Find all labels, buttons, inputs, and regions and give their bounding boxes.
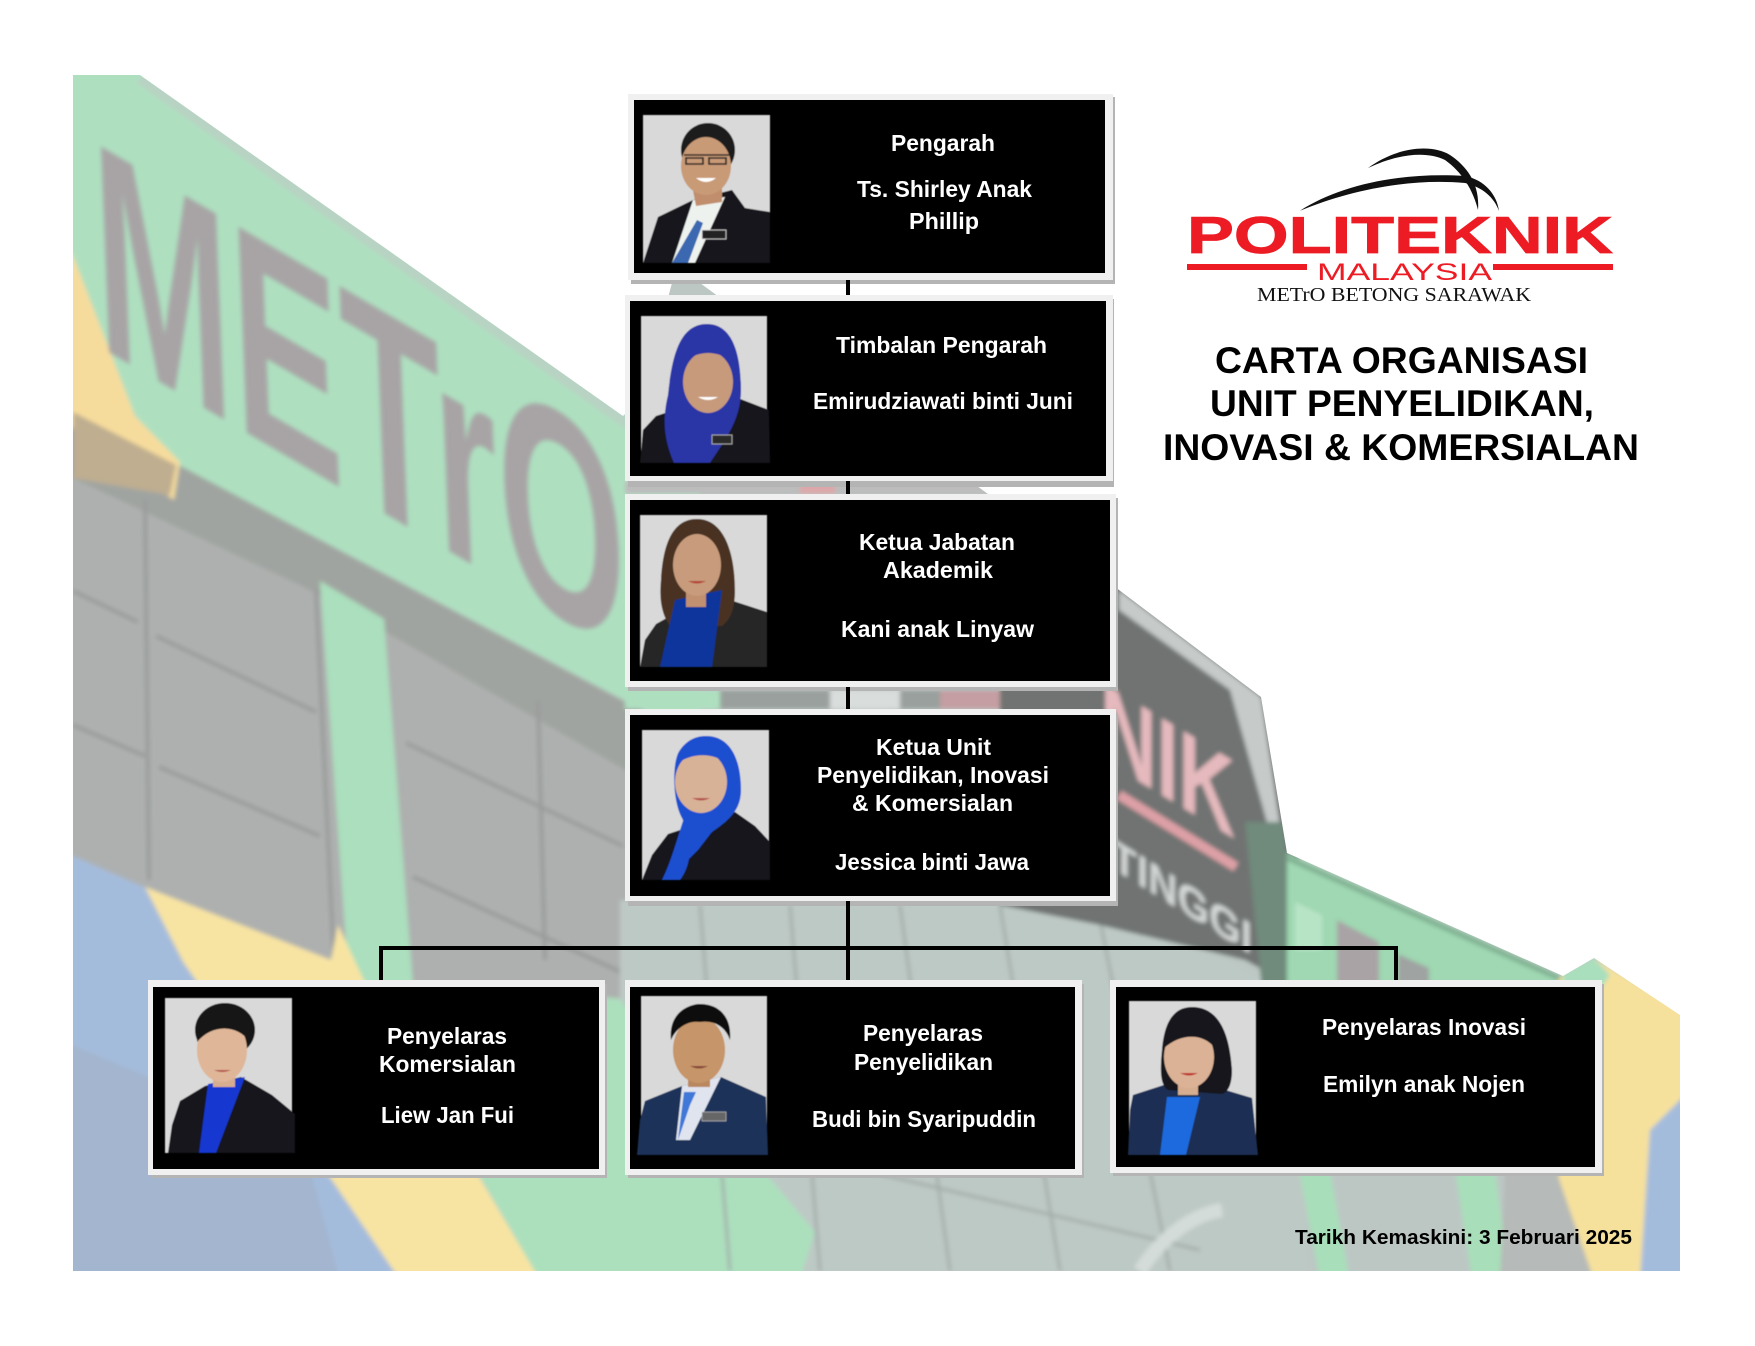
card: Ketua Jabatan Akademik [625,494,1118,691]
text: Ketua Unit: Ketua Unit [876,734,991,760]
text: Pengarah [857,130,1032,234]
logo: Politeknik Malaysia Metro Betong Sarawak: POLITEKNIK [1187,207,1614,265]
text: Ketua Unit [817,734,1049,875]
background: faded building photograph: TINGGI [1112,830,1252,965]
text: Ketua Unit: Jessica binti Jawa [835,849,1029,875]
card: Ketua Unit [625,709,1118,906]
card: Penyelaras Komersialan [148,980,607,1178]
portrait: Kani [640,515,767,667]
text: Ketua Jabatan Akademik: Ketua Jabatan [859,529,1015,555]
text: Penyelaras Komersialan: Liew Jan Fui [381,1102,514,1128]
text: Penyelaras Penyelidikan: Penyelaras [863,1020,983,1046]
text: Penyelaras Inovasi: Emilyn anak Nojen [1323,1071,1525,1097]
card: Pengarah [628,94,1115,284]
text: Timbalan Pengarah [813,332,1073,414]
text: Ketua Jabatan Akademik: Akademik [883,557,993,583]
portrait: Budi [637,996,768,1155]
footer: update date: Tarikh Kemaskini: 3 Februari 2025 [1295,1227,1632,1249]
title [1163,340,1639,468]
text: Pengarah: Phillip [909,208,979,234]
background: faded building photograph: METrO [87,74,633,721]
text: Penyelaras Inovasi: Penyelaras Inovasi [1322,1014,1526,1040]
text: Penyelaras Komersialan: Komersialan [379,1051,516,1077]
logo: Politeknik Malaysia Metro Betong Sarawak: MALAYSIA [1317,259,1492,286]
portrait: Shirley [643,115,770,263]
text: Ketua Jabatan Akademik [841,529,1034,642]
title: CARTA ORGANISASI [1215,340,1588,381]
title: UNIT PENYELIDIKAN, [1210,383,1594,424]
text: Penyelaras Komersialan [379,1023,516,1128]
logo: Politeknik Malaysia Metro Betong Sarawak [1187,149,1614,306]
card: Penyelaras Penyelidikan [625,980,1084,1178]
portrait: Emirudziawati [640,316,770,463]
portrait: Emilyn [1128,1001,1258,1155]
background: faded building photograph: NIK [1100,657,1235,863]
title: INOVASI & KOMERSIALAN [1163,427,1639,468]
text: Penyelaras Penyelidikan: Budi bin Syaripuddin [812,1106,1036,1132]
logo: Politeknik Malaysia Metro Betong Sarawak: METrO BETONG SARAWAK [1257,284,1532,306]
text: Penyelaras Komersialan: Penyelaras [387,1023,507,1049]
text: Pengarah: Pengarah [891,130,995,156]
text: Ketua Jabatan Akademik: Kani anak Linyaw [841,616,1034,642]
text: Penyelaras Inovasi [1322,1014,1526,1097]
connector lines [379,280,1398,980]
text: Pengarah: Ts. Shirley Anak [857,176,1032,202]
portrait: Liew [165,998,295,1153]
card: Penyelaras Inovasi [1110,980,1604,1176]
card: Timbalan Pengarah [625,295,1114,487]
text: Timbalan Pengarah: Emirudziawati binti Juni [813,388,1073,414]
portrait: Jessica [642,730,770,880]
text: Timbalan Pengarah: Timbalan Pengarah [836,332,1047,358]
text: Ketua Unit: Penyelidikan, Inovasi [817,762,1049,788]
text: Penyelaras Penyelidikan [812,1020,1036,1132]
text: Penyelaras Penyelidikan: Penyelidikan [854,1049,993,1075]
text: Ketua Unit: & Komersialan [852,790,1013,816]
